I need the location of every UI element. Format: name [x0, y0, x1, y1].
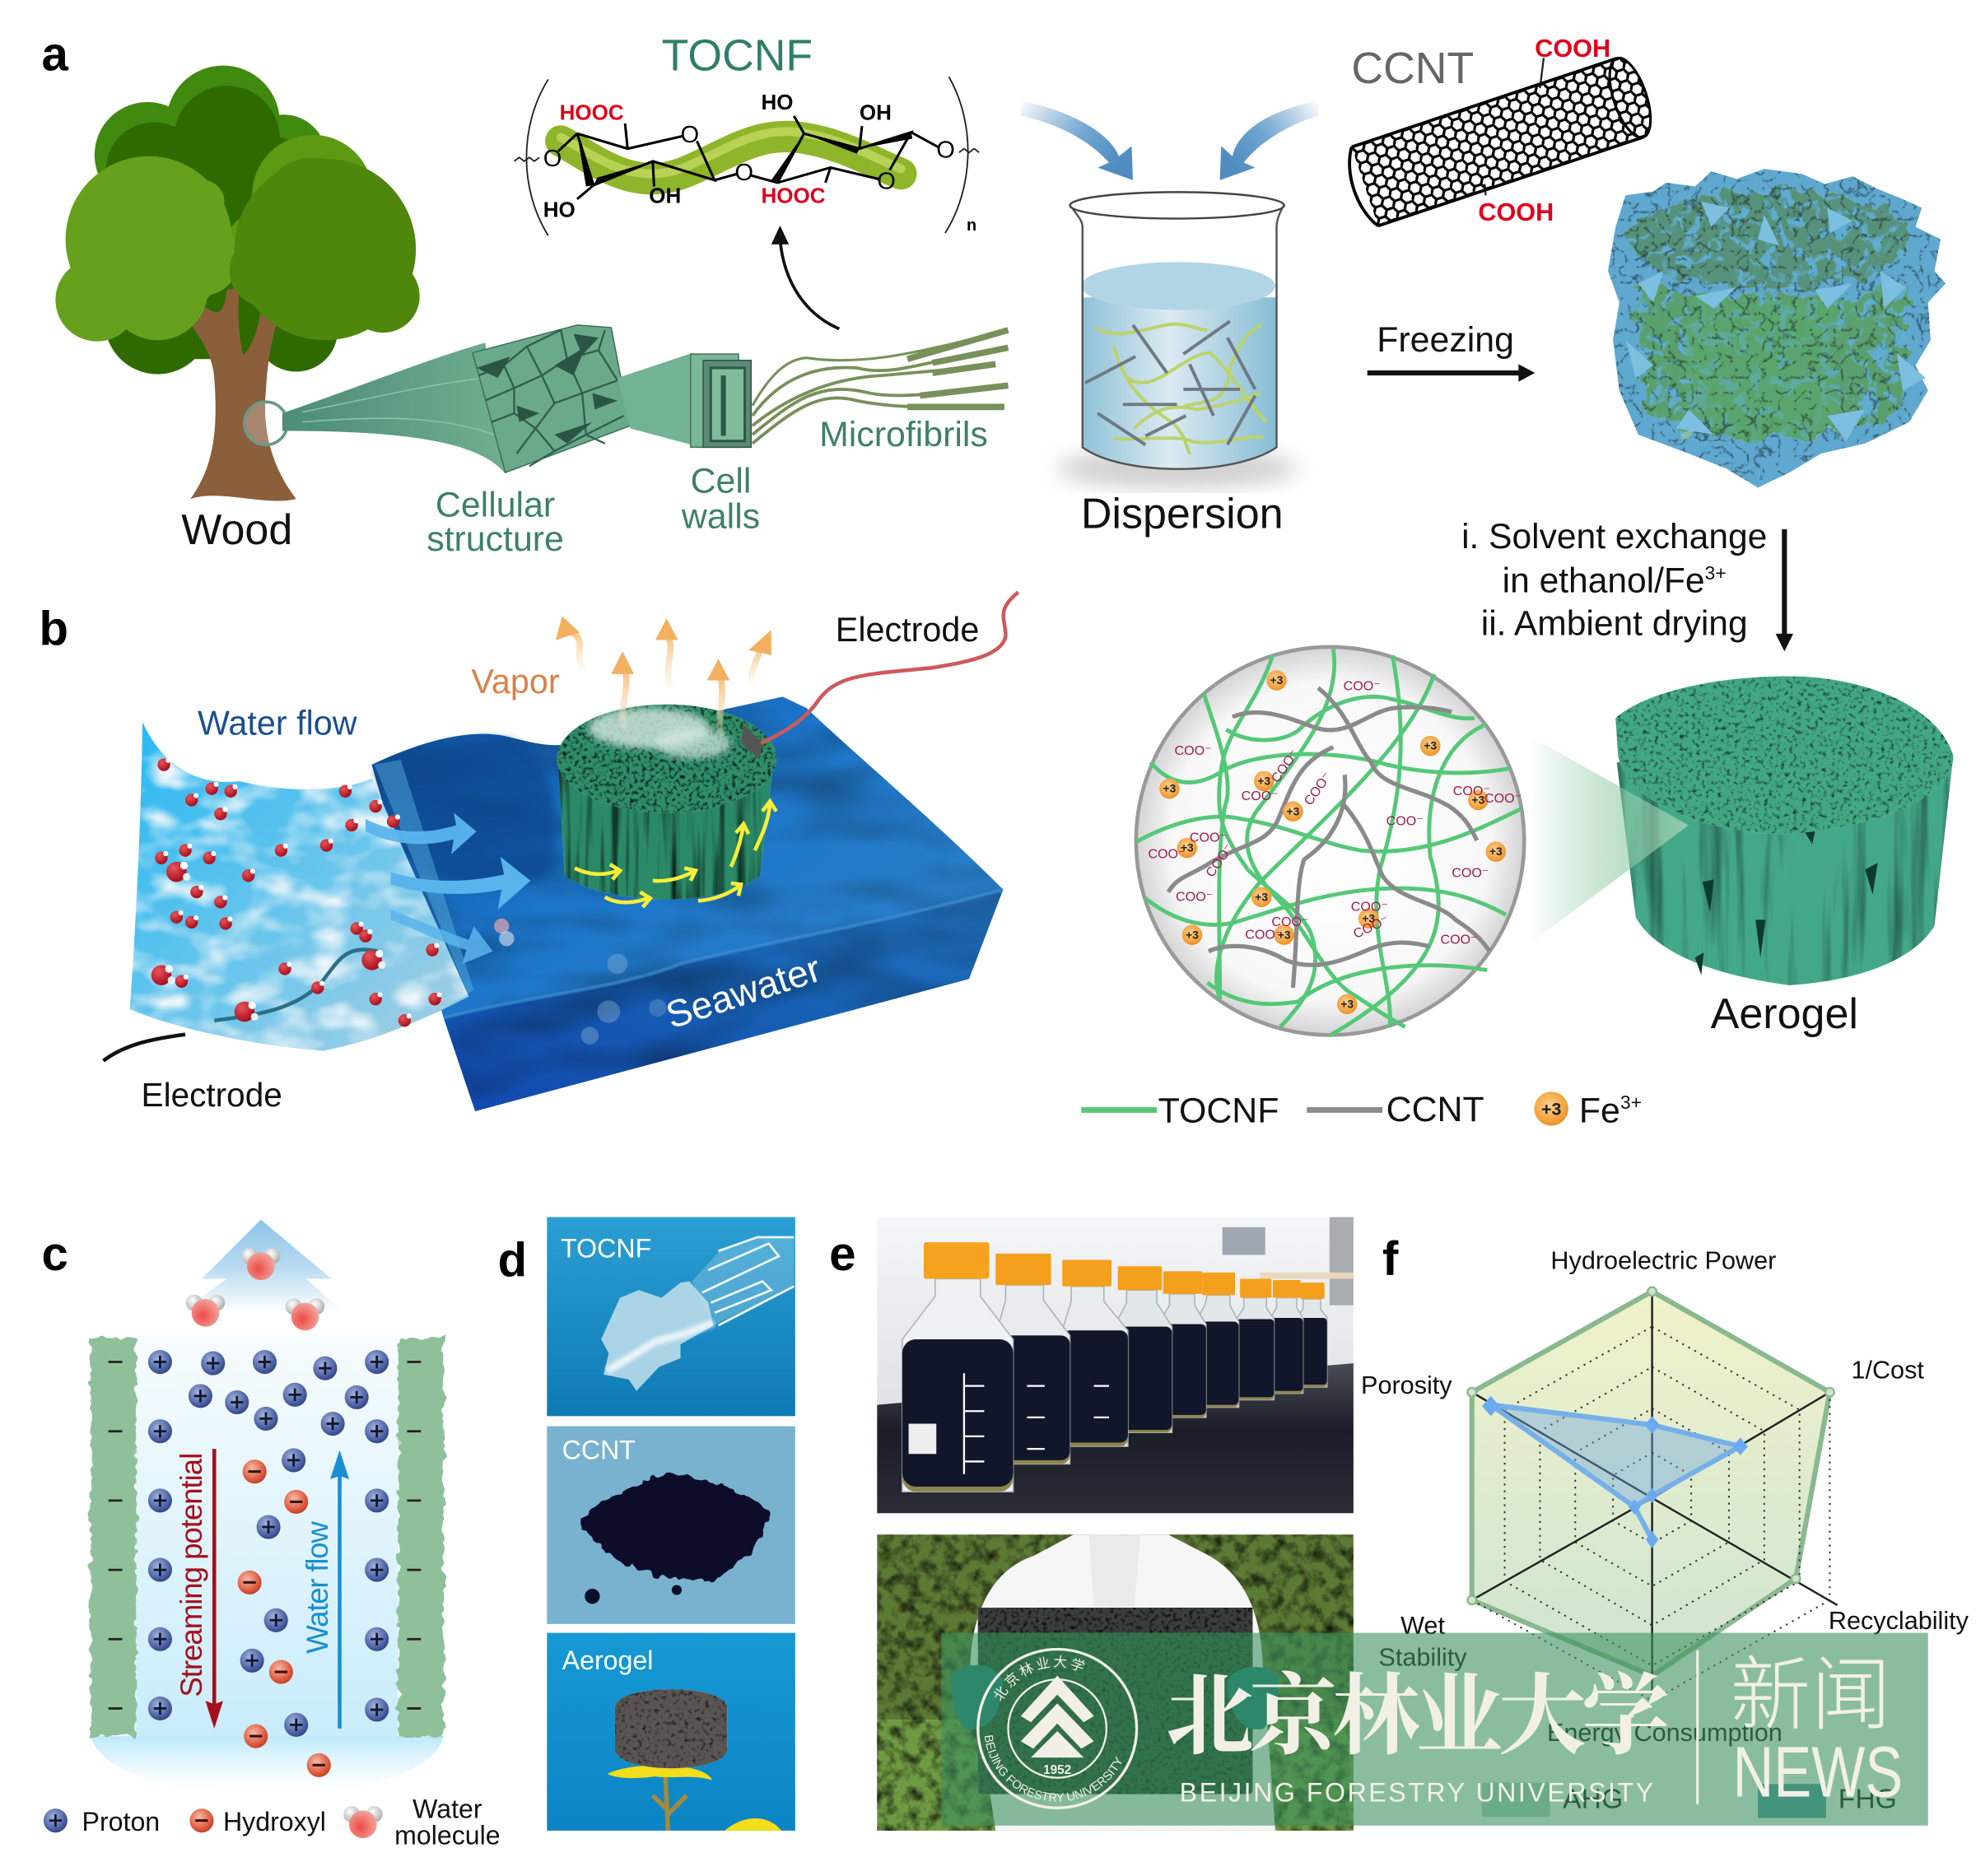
photo: aerogel on flower — [547, 1633, 795, 1831]
label: Water flow: Water flow — [198, 704, 357, 742]
Fe3+ ions: +3 — [1278, 929, 1291, 941]
text: solvent exchange steps: 3+ — [1705, 562, 1727, 584]
COO- groups: COO⁻ — [1301, 770, 1335, 808]
COO- groups: COO⁻ — [1351, 900, 1388, 915]
wall negative charges — [109, 1362, 421, 1708]
arrow: water molecules leaving — [179, 1220, 344, 1313]
radar axis labels: AHG — [1563, 1784, 1623, 1814]
watermark news english: NEWS — [1733, 1733, 1903, 1813]
photo: TOCNF gel — [547, 1217, 795, 1416]
COO- groups: COO⁻ — [1271, 915, 1308, 929]
label: Freezing: Freezing — [1377, 320, 1514, 360]
diagram: TOCNF molecule: OH — [860, 100, 892, 124]
COO- groups: COO⁻ — [1245, 927, 1282, 942]
panel e: scaled production photos — [829, 1217, 1354, 1831]
legend: network — [1081, 1090, 1642, 1131]
legend: ions: molecule — [394, 1821, 501, 1850]
label: Dispersion: Dispersion — [1081, 490, 1284, 538]
radar: AHG markers — [1482, 1396, 1748, 1548]
COO- groups: COO⁻ — [1386, 814, 1424, 829]
CCNT fibers — [1168, 688, 1489, 988]
icon: tree — [55, 66, 420, 500]
panel b: water evaporation device — [39, 592, 1018, 1114]
label: Microfibrils: Microfibrils — [819, 415, 988, 454]
icon: beaker with dispersion — [1057, 192, 1297, 489]
Fe3+ ions: +3 — [1489, 845, 1503, 858]
legend: ions: Water — [412, 1795, 482, 1824]
label: Seawater: Seawater — [660, 947, 826, 1036]
arrowheads: vapor — [556, 616, 771, 681]
COO- groups: COO⁻ — [1484, 791, 1522, 806]
COO- groups: COO⁻ — [1190, 830, 1227, 845]
legend: network: +3 — [1541, 1100, 1561, 1120]
diagram: TOCNF molecule: HOOC — [560, 100, 624, 124]
label: Electrode bottom: Electrode — [142, 1076, 282, 1114]
diagram: TOCNF molecule — [515, 77, 979, 235]
arrows: vapor — [567, 630, 760, 736]
radar spokes — [1472, 1292, 1838, 1701]
TOCNF fibers — [1137, 649, 1521, 1036]
COO- groups: COO⁻ — [1148, 846, 1185, 861]
radar axis labels: 1/Cost — [1851, 1356, 1924, 1384]
Fe3+ ions: +3 — [1287, 805, 1300, 817]
photo: CCNT powder: CCNT — [562, 1435, 636, 1464]
Fe3+ ions: +3 — [1270, 674, 1284, 687]
diagram: TOCNF molecule: HO — [543, 197, 576, 221]
COO- groups: COO⁻ — [1203, 841, 1237, 880]
Fe3+ ions: +3 — [1163, 783, 1177, 795]
label: Water flow rotated: Water flow — [301, 1521, 334, 1654]
panel c: streaming potential — [42, 1220, 501, 1850]
watermark seal — [976, 1648, 1138, 1809]
COO- groups: COO⁻ — [1176, 889, 1213, 904]
watermark band — [941, 1633, 1928, 1826]
COO- groups: COO⁻ — [1242, 789, 1279, 803]
legend: ions — [44, 1795, 501, 1850]
heading: TOCNF: TOCNF — [662, 32, 813, 81]
legend: network: 3+ — [1620, 1092, 1642, 1113]
diagram: TOCNF molecule: HOOC — [761, 183, 826, 207]
panel label d: d — [498, 1233, 527, 1287]
watermark seal: 1952 — [1043, 1763, 1071, 1777]
COO- groups: COO⁻ — [1440, 932, 1478, 947]
watermark chinese name: 北京林业大学 — [1166, 1645, 1670, 1771]
panel label c: c — [42, 1227, 68, 1281]
legend: network: CCNT — [1386, 1090, 1484, 1129]
arrow: water flow — [330, 1450, 349, 1729]
watermark seal: BEIJING FORESTRY UNIVERSITY — [985, 1735, 1121, 1802]
panel label a: a — [42, 28, 69, 81]
radar: FHG polygon — [1472, 1292, 1829, 1676]
panel label b: b — [39, 603, 68, 656]
photo: TOCNF gel: TOCNF — [561, 1233, 651, 1263]
COO- groups: COO⁻ — [1452, 865, 1489, 880]
Fe3+ ions: +3 — [1186, 929, 1199, 941]
label: CCNT: CCNT — [1351, 44, 1474, 93]
photo: bottles — [877, 1217, 1354, 1513]
COO- groups: COO⁻ — [1453, 784, 1490, 798]
photo: researcher holding aerogel plate — [877, 1534, 1354, 1831]
Fe3+ ions: +3 — [1181, 842, 1194, 854]
water flow sheet — [104, 722, 474, 1061]
watermark news chinese: 新闻 — [1730, 1629, 1891, 1746]
label: Cellular structure: structure — [426, 519, 564, 559]
label: Cell walls: Cell — [691, 461, 751, 500]
watermark divider — [1697, 1650, 1699, 1804]
icon: microfibrils — [753, 330, 1008, 444]
legend: ions: Proton — [82, 1807, 160, 1836]
diagram: TOCNF molecule: n — [967, 216, 976, 235]
photo: CCNT powder — [547, 1427, 795, 1624]
radar axis labels: Stability — [1378, 1643, 1467, 1671]
radar grid — [1472, 1327, 1829, 1701]
COO- groups: COO⁻ — [1269, 747, 1302, 785]
Fe3+ ions: +3 — [1257, 775, 1270, 788]
channel wall left — [91, 1338, 136, 1736]
diagram: TOCNF molecule: HO — [761, 90, 793, 114]
panel label e: e — [829, 1227, 855, 1281]
protons — [148, 1350, 389, 1737]
radar: FHG markers — [1467, 1287, 1834, 1604]
diagram: TOCNF molecule: O — [543, 146, 562, 172]
label: Cellular structure: Cellular — [436, 486, 555, 525]
text: solvent exchange steps: in ethanol/Fe — [1503, 561, 1727, 600]
legend: network: TOCNF — [1158, 1092, 1279, 1131]
diagram: TOCNF molecule: O — [877, 169, 896, 195]
radar: AHG polygon — [1491, 1405, 1741, 1539]
COO- groups: COO⁻ — [1175, 743, 1212, 758]
legend: network: Fe — [1579, 1092, 1620, 1131]
diagram: TOCNF molecule: O — [936, 137, 955, 163]
arrow: streaming potential — [206, 1449, 223, 1729]
icon: carbon nanotube — [1341, 35, 1659, 230]
label: Aerogel: Aerogel — [1711, 990, 1858, 1038]
Fe3+ ions: +3 — [1424, 740, 1437, 752]
Fe3+ ions: +3 — [1255, 891, 1268, 903]
arrow: solvent exchange — [1776, 529, 1793, 651]
channel background — [91, 1335, 444, 1795]
icon: cellular structure — [282, 325, 630, 473]
watermark: Beijing Forestry University News — [941, 1629, 1928, 1826]
icon: aerogel evaporator on seawater — [557, 705, 776, 899]
water molecules — [186, 1248, 324, 1330]
radar axis labels: Porosity — [1361, 1371, 1452, 1399]
Fe3+ ions — [1159, 670, 1506, 1014]
radar axis labels — [1361, 1246, 1969, 1814]
radar axis labels: Hydroelectric Power — [1550, 1246, 1776, 1274]
icon: carbon nanotube: COOH — [1535, 35, 1610, 63]
Fe3+ ions: +3 — [1472, 794, 1485, 806]
text: solvent exchange steps: ii. Ambient drying — [1481, 603, 1748, 643]
watermark seal: 北京林业大学 — [994, 1655, 1085, 1701]
legend: ions: Hydroxyl — [223, 1807, 326, 1836]
COO- groups: COO⁻ — [1344, 679, 1381, 694]
radar legend swatches — [1482, 1783, 1826, 1818]
label: Electrode top: Electrode — [836, 611, 979, 649]
diagram: TOCNF molecule: OH — [649, 183, 681, 207]
radar axis labels: FHG — [1839, 1784, 1897, 1814]
watermark english name: BEIJING FORESTRY UNIVERSITY — [1180, 1778, 1653, 1808]
diagram: TOCNF molecule: O — [681, 122, 699, 148]
bottle series — [902, 1242, 1327, 1492]
radar axis labels: Wet — [1400, 1612, 1445, 1640]
photo: aerogel on flower: Aerogel — [562, 1646, 653, 1675]
channel wall right — [398, 1338, 444, 1736]
label: Cell walls: walls — [681, 496, 760, 536]
icon: frozen cylinder — [1608, 169, 1946, 487]
radar axis labels: Energy Consumption — [1547, 1719, 1783, 1747]
Fe3+ ions: +3 — [1362, 912, 1375, 924]
panel label f: f — [1382, 1232, 1399, 1286]
COO- groups — [1148, 679, 1522, 947]
label: Wood: Wood — [181, 506, 292, 554]
arrow: CCNT into beaker — [1220, 100, 1318, 180]
panel d: material photos — [498, 1217, 795, 1831]
arrow: microfibrils to TOCNF — [771, 226, 839, 328]
radar axis labels: Recyclability — [1829, 1607, 1969, 1635]
icon: aerogel cylinder — [1531, 677, 1953, 985]
icon: cell walls — [618, 353, 751, 447]
label: Vapor: Vapor — [471, 663, 560, 701]
icon: carbon nanotube: COOH — [1478, 198, 1554, 226]
arrow: freezing — [1368, 364, 1535, 382]
arrows: water flow direction — [366, 812, 530, 964]
diagram: TOCNF molecule: O — [734, 160, 753, 186]
panel f: radar chart — [1361, 1232, 1969, 1818]
seawater block — [372, 696, 1003, 1111]
COO- groups: COO⁻ — [1351, 913, 1391, 942]
text: solvent exchange steps: i. Solvent exchange — [1461, 517, 1767, 556]
panel a: wood to aerogel process — [42, 28, 1946, 651]
label: Streaming potential: Streaming potential — [175, 1453, 208, 1697]
hydroxyl ions — [238, 1459, 331, 1777]
Fe3+ ions: +3 — [1340, 998, 1354, 1010]
electrode wire — [761, 592, 1018, 743]
zoomed network circle — [1136, 647, 1689, 1036]
arrow: TOCNF into beaker — [1021, 100, 1133, 180]
arrows: yellow capillary flow — [575, 801, 776, 907]
